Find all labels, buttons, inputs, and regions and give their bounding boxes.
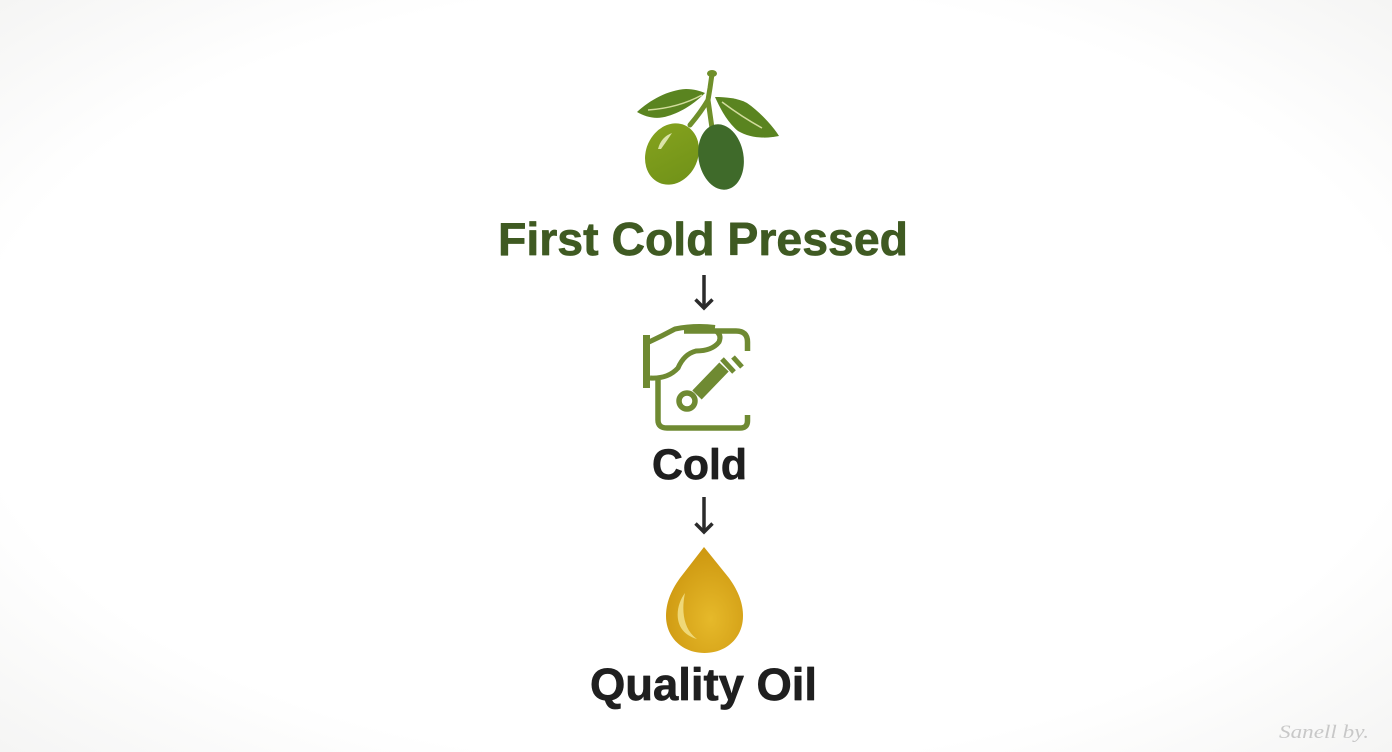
title: First Cold Pressed: First Cold Pressed xyxy=(498,213,908,265)
hand xyxy=(650,331,720,378)
thermometer xyxy=(697,367,724,395)
left leaf xyxy=(637,89,705,118)
icon: oil drop xyxy=(666,547,743,653)
icon: hand and thermometer xyxy=(646,327,748,428)
watermark signature: Sanell by. xyxy=(1279,722,1369,743)
label: Cold: Cold xyxy=(652,441,747,489)
arrow 1 xyxy=(696,275,712,308)
right leaf xyxy=(715,97,779,138)
stem xyxy=(690,74,712,128)
frame xyxy=(649,327,715,342)
dark olive xyxy=(693,121,749,193)
label: Quality Oil: Quality Oil xyxy=(590,659,817,710)
arrow 2 xyxy=(696,497,712,532)
green olive xyxy=(635,115,709,193)
icon: olive branch xyxy=(635,70,779,193)
